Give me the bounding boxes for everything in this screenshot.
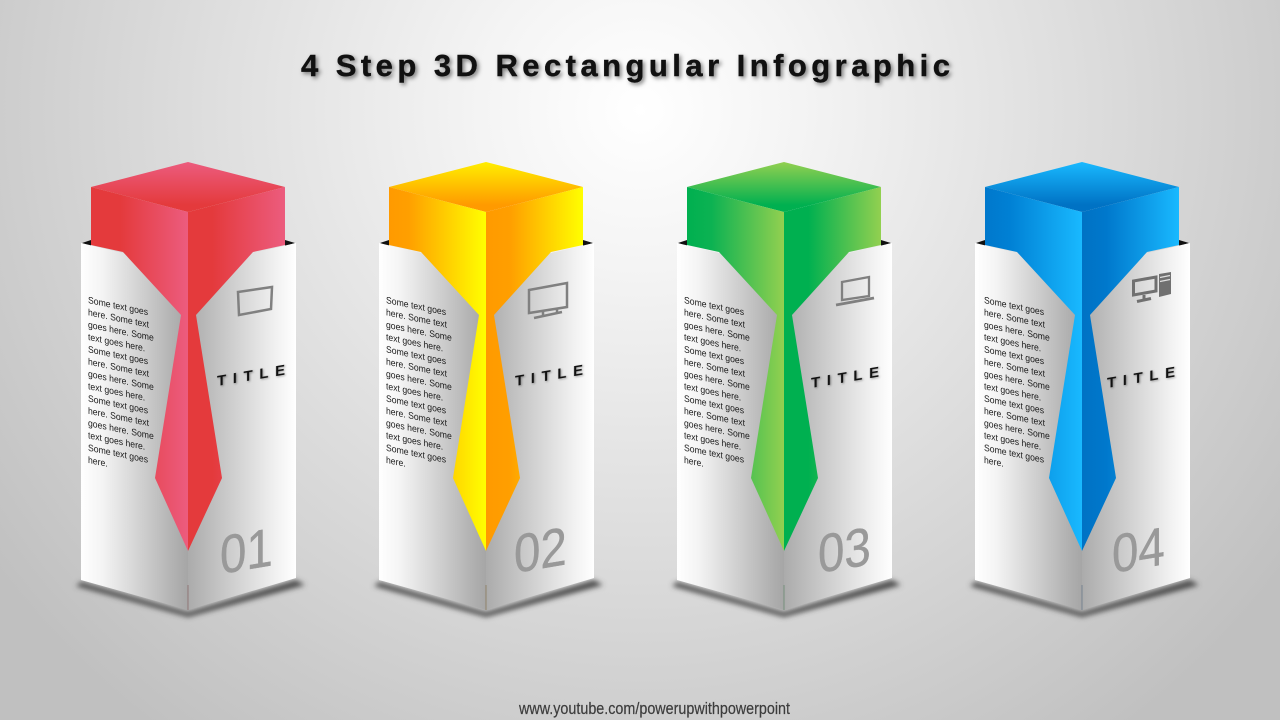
text block: text goes here. [386, 381, 443, 403]
text block: Some text goes [386, 393, 446, 416]
text block: text goes here. [88, 381, 145, 403]
footer url: www.youtube.com/powerupwithpowerpoint [518, 699, 790, 718]
heading: TITLE [515, 361, 590, 390]
text block: text goes here. [684, 430, 741, 452]
text block: Some text goes [88, 295, 148, 317]
number: 01 [220, 517, 273, 586]
text block: here. Some text [386, 356, 447, 379]
text block: here. Some text [386, 307, 447, 330]
number: 04 [1112, 516, 1165, 585]
text block: Some text goes [386, 295, 446, 317]
white box right face [784, 243, 892, 610]
text block: goes here. Some [684, 418, 750, 441]
cube top face [389, 162, 583, 212]
number: 03 [818, 516, 871, 585]
text block: text goes here. [386, 332, 443, 354]
text block: here. [88, 455, 108, 469]
base shadow [672, 580, 901, 617]
text block: text goes here. [984, 430, 1041, 452]
cube right face and tie right half [784, 187, 881, 551]
text block: Some text goes [984, 295, 1044, 317]
white box left face [975, 243, 1082, 610]
text block: text goes here. [684, 381, 741, 403]
text block: goes here. Some [88, 369, 154, 392]
cube left face and tie left half [687, 187, 784, 551]
notch corners [380, 240, 593, 246]
text block: Some text goes [88, 442, 148, 465]
text block: here. Some text [984, 405, 1045, 428]
cube right face and tie right half [1082, 187, 1179, 551]
text block: here. [684, 455, 704, 469]
text block: goes here. Some [684, 319, 750, 343]
cube left face and tie left half [91, 187, 188, 551]
text block: Some text goes [88, 393, 148, 416]
center crease [1081, 585, 1083, 610]
white box right face [188, 243, 296, 610]
text block: goes here. Some [984, 418, 1050, 441]
white box right face [1082, 243, 1190, 610]
notch corners [678, 240, 891, 246]
icon: desktop computer [1134, 272, 1171, 302]
text block: Some text goes [684, 344, 744, 367]
heading: TITLE [1107, 363, 1182, 392]
text block: goes here. Some [88, 418, 154, 441]
text block: here. Some text [984, 307, 1045, 330]
text block: goes here. Some [386, 369, 452, 392]
white box left face [379, 243, 486, 610]
text block: text goes here. [88, 430, 145, 452]
base shadow [374, 580, 603, 617]
heading: TITLE [217, 361, 292, 390]
center crease [485, 585, 487, 610]
text block: goes here. Some [984, 319, 1050, 343]
text block: Some text goes [684, 295, 744, 317]
text block: goes here. Some [386, 418, 452, 441]
icon: laptop [836, 277, 874, 305]
panel: step 02 yellow [374, 162, 603, 617]
text block: goes here. Some [386, 319, 452, 343]
text block: here. Some text [88, 405, 149, 428]
text block: text goes here. [684, 332, 741, 354]
cube top face [91, 162, 285, 212]
text block: here. Some text [684, 405, 745, 428]
text block: text goes here. [984, 381, 1041, 403]
cube top face [985, 162, 1179, 212]
white box left face [677, 243, 784, 610]
text block: Some text goes [88, 344, 148, 367]
text block: Some text goes [984, 442, 1044, 465]
text block: text goes here. [386, 430, 443, 452]
white box left face [81, 243, 188, 610]
text block: Some text goes [984, 344, 1044, 367]
text block: Some text goes [984, 393, 1044, 416]
cube right face and tie right half [188, 187, 285, 551]
center crease [187, 585, 189, 610]
notch corners [976, 240, 1189, 246]
icon: tablet [238, 287, 272, 315]
text block: Some text goes [386, 344, 446, 367]
text block: here. [984, 455, 1004, 469]
panel: step 01 red [76, 162, 305, 617]
notch corners [82, 240, 295, 246]
center crease [783, 585, 785, 610]
panel: step 04 blue [970, 162, 1199, 617]
base shadow [76, 580, 305, 617]
text block: goes here. Some [88, 319, 154, 343]
text block: Some text goes [684, 442, 744, 465]
number: 02 [514, 516, 567, 585]
text block: Some text goes [386, 442, 446, 465]
cube right face and tie right half [486, 187, 583, 551]
text block: Some text goes [684, 393, 744, 416]
text block: text goes here. [984, 332, 1041, 354]
cube top face [687, 162, 881, 212]
text block: here. Some text [684, 356, 745, 379]
base shadow [970, 580, 1199, 617]
text block: here. Some text [88, 356, 149, 379]
text block: here. Some text [386, 405, 447, 428]
cube left face and tie left half [389, 187, 486, 551]
text block: here. Some text [88, 307, 149, 330]
text block: here. Some text [984, 356, 1045, 379]
text block: here. [386, 455, 406, 469]
text block: goes here. Some [684, 369, 750, 392]
white box right face [486, 243, 594, 610]
heading: TITLE [811, 363, 886, 392]
cube left face and tie left half [985, 187, 1082, 551]
title: 4 Step 3D Rectangular Infographic [301, 48, 950, 83]
text block: goes here. Some [984, 369, 1050, 392]
text block: here. Some text [684, 307, 745, 330]
icon: television [529, 283, 567, 318]
panel: step 03 green [672, 162, 901, 617]
text block: text goes here. [88, 332, 145, 354]
